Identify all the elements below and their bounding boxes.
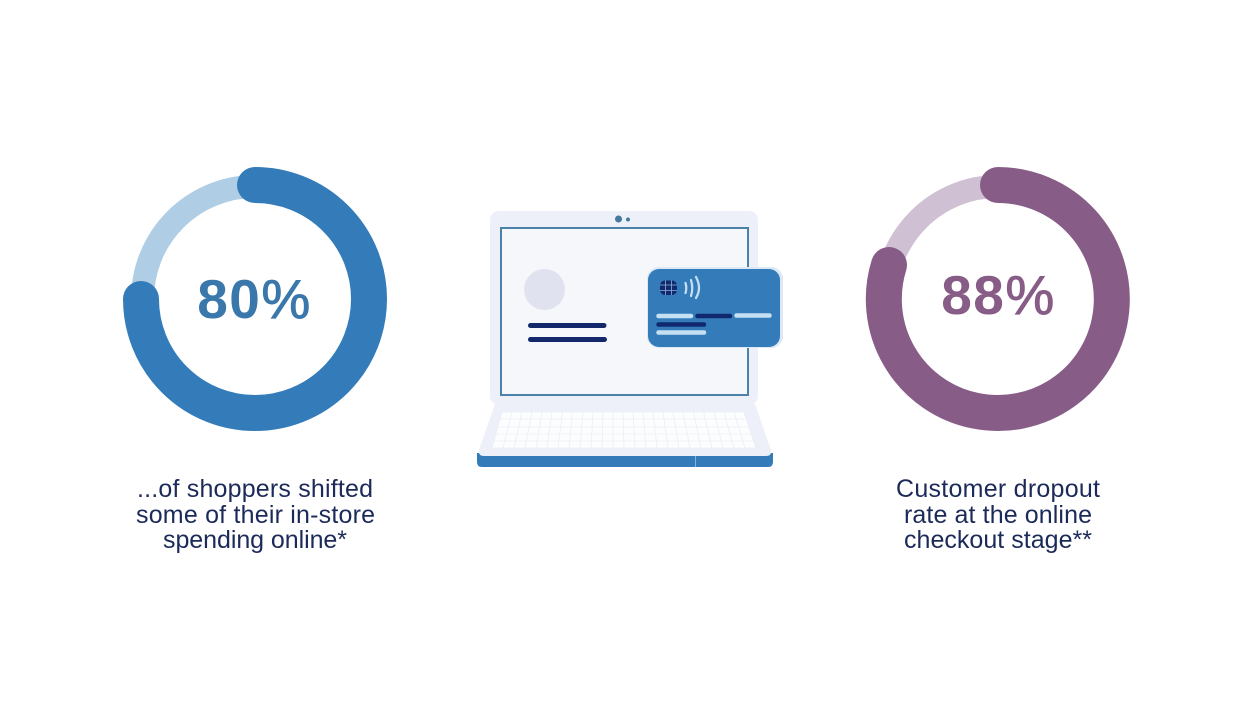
caption: shoppers shifted online: spending online* <box>163 526 347 554</box>
screen <box>501 228 748 395</box>
panel: 80% statistic <box>136 185 375 554</box>
caption: shoppers shifted online <box>136 475 375 554</box>
icon: laptop with payment card <box>477 211 783 467</box>
card number lines <box>658 316 770 332</box>
laptop base <box>477 404 773 467</box>
avatar placeholder <box>524 269 565 310</box>
caption: checkout dropout rate <box>896 475 1100 554</box>
caption: checkout dropout rate: Customer dropout <box>896 475 1100 503</box>
donut chart: 88% <box>884 185 1112 413</box>
payment card <box>647 267 783 348</box>
webcam <box>615 216 630 222</box>
text lines <box>530 326 604 340</box>
caption: shoppers shifted online: ...of shoppers shifted <box>137 475 373 503</box>
value: 88%: 88% <box>941 264 1056 326</box>
donut chart: 80% <box>141 185 369 413</box>
value: 80%: 80% <box>197 268 312 330</box>
caption: shoppers shifted online: some of their in-store <box>136 501 375 529</box>
contactless waves <box>686 277 699 298</box>
laptop lid <box>490 211 758 405</box>
keyboard <box>492 412 756 448</box>
panel: 88% statistic <box>884 185 1112 554</box>
caption: checkout dropout rate: checkout stage** <box>904 526 1092 554</box>
chip <box>660 280 677 295</box>
caption: checkout dropout rate: rate at the online <box>904 501 1092 529</box>
